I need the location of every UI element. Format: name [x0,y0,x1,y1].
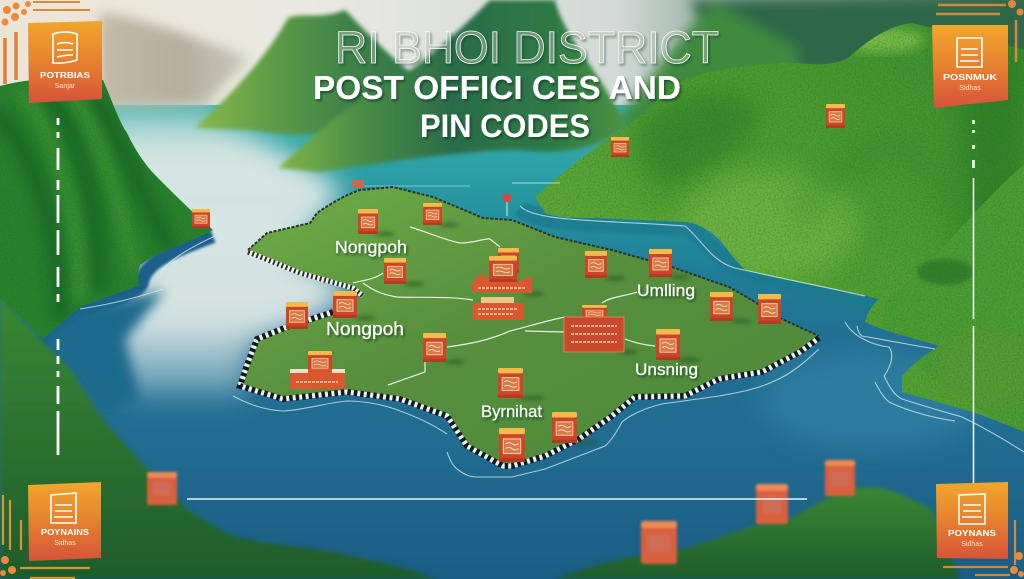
hill: bottom right [555,488,960,579]
labelled boards on the island [290,273,624,389]
title [313,22,719,144]
place label: Nongpoh south: Nongpoh [326,318,404,339]
dark river left [40,236,213,345]
river lines [80,183,1024,477]
small flags at the island top [352,180,512,216]
blurred mid hill A [195,10,450,135]
corner banner: top right: Sidhas [959,85,981,92]
frame lines [58,118,974,499]
pale reflection on water [100,104,350,400]
hill: left [0,80,213,339]
island north shoreline [248,187,819,336]
corner banner: bottom right: POYNANS [948,529,997,538]
corner banner: top left: Sanjar [55,83,76,90]
island south shoreline dashes [240,312,819,466]
background sky [0,0,1024,140]
hill: bottom left [0,299,437,579]
corner banner: top right [932,0,1024,108]
corner banner: bottom right [936,482,1024,577]
corner banner: top left [2,1,102,103]
place label: Byrnihat: Byrnihat [481,402,542,421]
dark water under left hill [40,290,165,415]
corner banner: bottom left: Sidhas [54,540,76,547]
district map island [240,187,819,466]
corner banner: top left: POTRBIAS [40,70,90,80]
title line 3: PIN CODES [420,108,590,144]
island land [240,187,819,466]
island west shoreline [248,252,363,296]
post office markers on the island [286,203,781,462]
road lines [353,227,655,385]
lighter patch of blue water [760,350,980,450]
title line 2: POST OFFICI CES AND [313,69,681,106]
corner banner: bottom left: POYNAINS [41,528,90,537]
corner banner: top right: POSNMUK [943,73,997,82]
hill: right large [530,20,1024,440]
place label: Nongpoh north: Nongpoh [335,237,407,257]
blurred mid hill B [278,0,625,172]
marker shadows [355,222,751,446]
markers outside the island [147,104,855,564]
far hazy mountains [100,0,1024,140]
title line 1: RI BHOI DISTRICT [335,22,719,73]
corner banner: bottom left [0,482,101,578]
island south shoreline underlay [240,312,819,466]
place label: Umlling: Umlling [637,281,695,300]
place label: Unsning: Unsning [635,360,698,379]
corner banner: bottom right: Sidhas [961,541,983,548]
river band north-east [520,208,880,305]
